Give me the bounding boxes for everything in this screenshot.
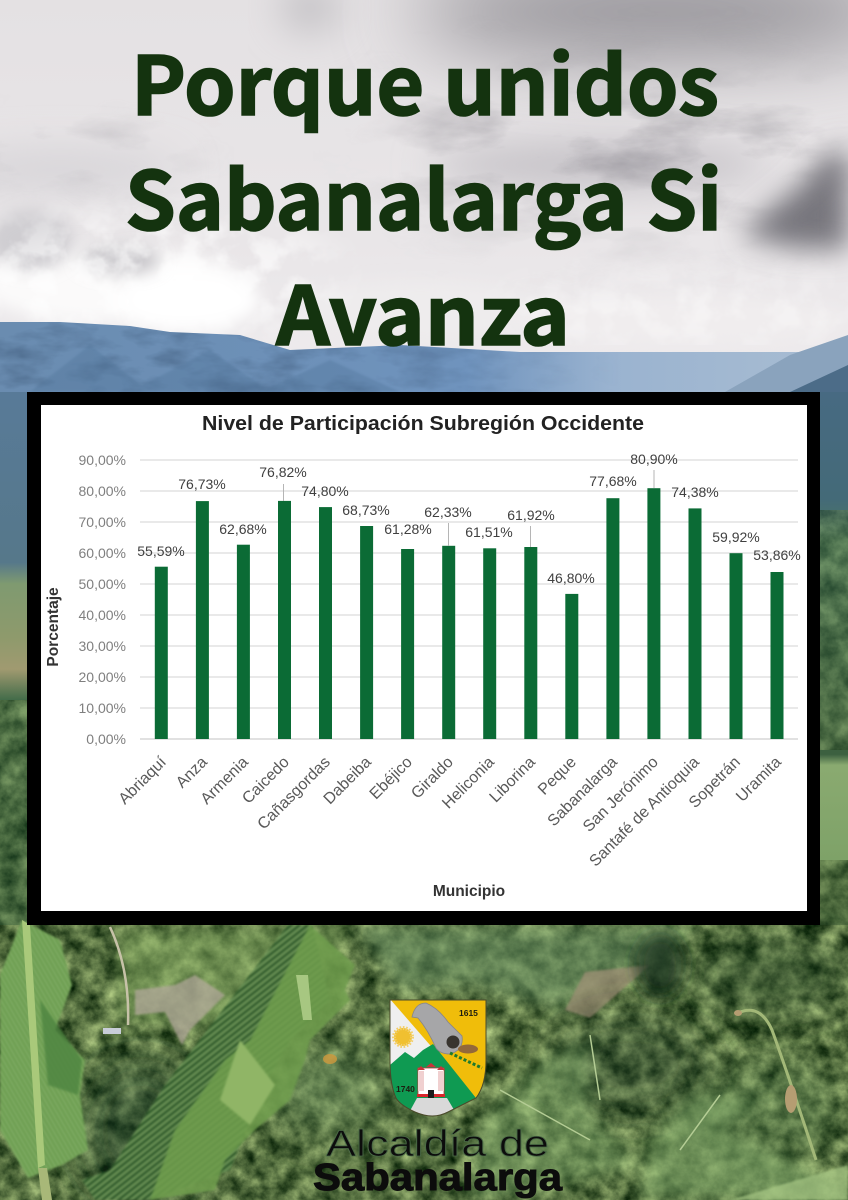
icon: municipal coat of arms [389, 999, 487, 1120]
data labels: 55,59% [137, 543, 185, 559]
logo text: Alcaldía de [326, 1123, 549, 1164]
data labels: 59,92% [712, 529, 760, 545]
y axis labels: 70,00% [79, 514, 126, 530]
sun [394, 1028, 412, 1046]
data labels [137, 451, 801, 586]
y axis labels: 90,00% [79, 452, 126, 468]
x axis labels: Uramita [733, 754, 785, 805]
data labels: 76,73% [178, 476, 226, 492]
data labels: 62,68% [219, 521, 267, 537]
data labels: 74,38% [671, 484, 719, 500]
x axis labels [116, 753, 785, 870]
x axis labels: Armenia [198, 754, 252, 808]
bull head and bread [446, 1036, 478, 1054]
background: cloudy sky [0, 0, 848, 352]
data labels: 80,90% [630, 451, 678, 467]
title [125, 22, 722, 369]
background: village and path [103, 927, 225, 1045]
y axis labels: 80,00% [79, 483, 126, 499]
title: Avanza [275, 252, 570, 369]
panel: bar chart frame [27, 392, 820, 925]
background: diagonal banana leaf [82, 925, 355, 1200]
x axis labels: Anza [173, 754, 211, 792]
background: fern and stem [470, 1010, 848, 1200]
title: Porque unidos [131, 22, 719, 139]
data labels: 76,82% [259, 464, 307, 480]
logo text [313, 1123, 563, 1199]
y axis labels: 10,00% [79, 700, 126, 716]
y axis title: Porcentaje [45, 587, 62, 667]
background: green valley and forest [0, 392, 848, 1200]
x axis labels: Cañasgordas [255, 754, 334, 833]
year labels: 1615 [459, 1008, 478, 1018]
x axis labels: Dabeiba [321, 754, 375, 808]
x axis labels: Sabanalarga [545, 754, 621, 830]
x axis labels: Sopetrán [686, 754, 744, 812]
data labels: 61,28% [384, 521, 432, 537]
data labels: 74,80% [301, 483, 349, 499]
olive branch [450, 1053, 482, 1068]
gridlines [140, 460, 798, 739]
background: blue mountains [0, 322, 848, 392]
y axis labels: 30,00% [79, 638, 126, 654]
year labels: 1740 [396, 1084, 415, 1094]
data labels: 46,80% [547, 570, 595, 586]
background: vertical banana leaf [0, 920, 88, 1200]
chart title: Nivel de Participación Subregión Occidente [202, 413, 644, 435]
leader lines [284, 470, 654, 547]
x axis labels: Ebéjico [367, 754, 416, 803]
data labels: 53,86% [753, 547, 801, 563]
y axis labels: 40,00% [79, 607, 126, 623]
x axis labels: Santafé de Antioquia [586, 754, 703, 870]
x axis labels: San Jerónimo [580, 754, 662, 836]
x axis labels: Liborina [487, 754, 539, 806]
y axis labels: 60,00% [79, 545, 126, 561]
bars [155, 488, 784, 739]
y axis labels: 20,00% [79, 669, 126, 685]
year labels [396, 1008, 478, 1094]
title: Sabanalarga Si [125, 137, 722, 254]
y axis labels: 50,00% [79, 576, 126, 592]
x axis title: Municipio [433, 883, 505, 900]
x axis labels: Peque [535, 754, 580, 799]
logo text: Sabanalarga [313, 1157, 563, 1199]
data labels: 68,73% [342, 502, 390, 518]
x axis labels: Abriaquí [116, 753, 170, 808]
data labels: 77,68% [589, 473, 637, 489]
data labels: 61,92% [507, 507, 555, 523]
cornucopia [412, 1003, 462, 1054]
y axis labels [79, 452, 126, 747]
data labels: 62,33% [424, 504, 472, 520]
x axis labels: Giraldo [408, 754, 457, 802]
y axis labels: 0,00% [86, 731, 126, 747]
church [417, 1063, 445, 1098]
data labels: 61,51% [465, 524, 513, 540]
x axis labels: Heliconia [439, 754, 498, 812]
x axis labels: Caicedo [239, 754, 293, 807]
